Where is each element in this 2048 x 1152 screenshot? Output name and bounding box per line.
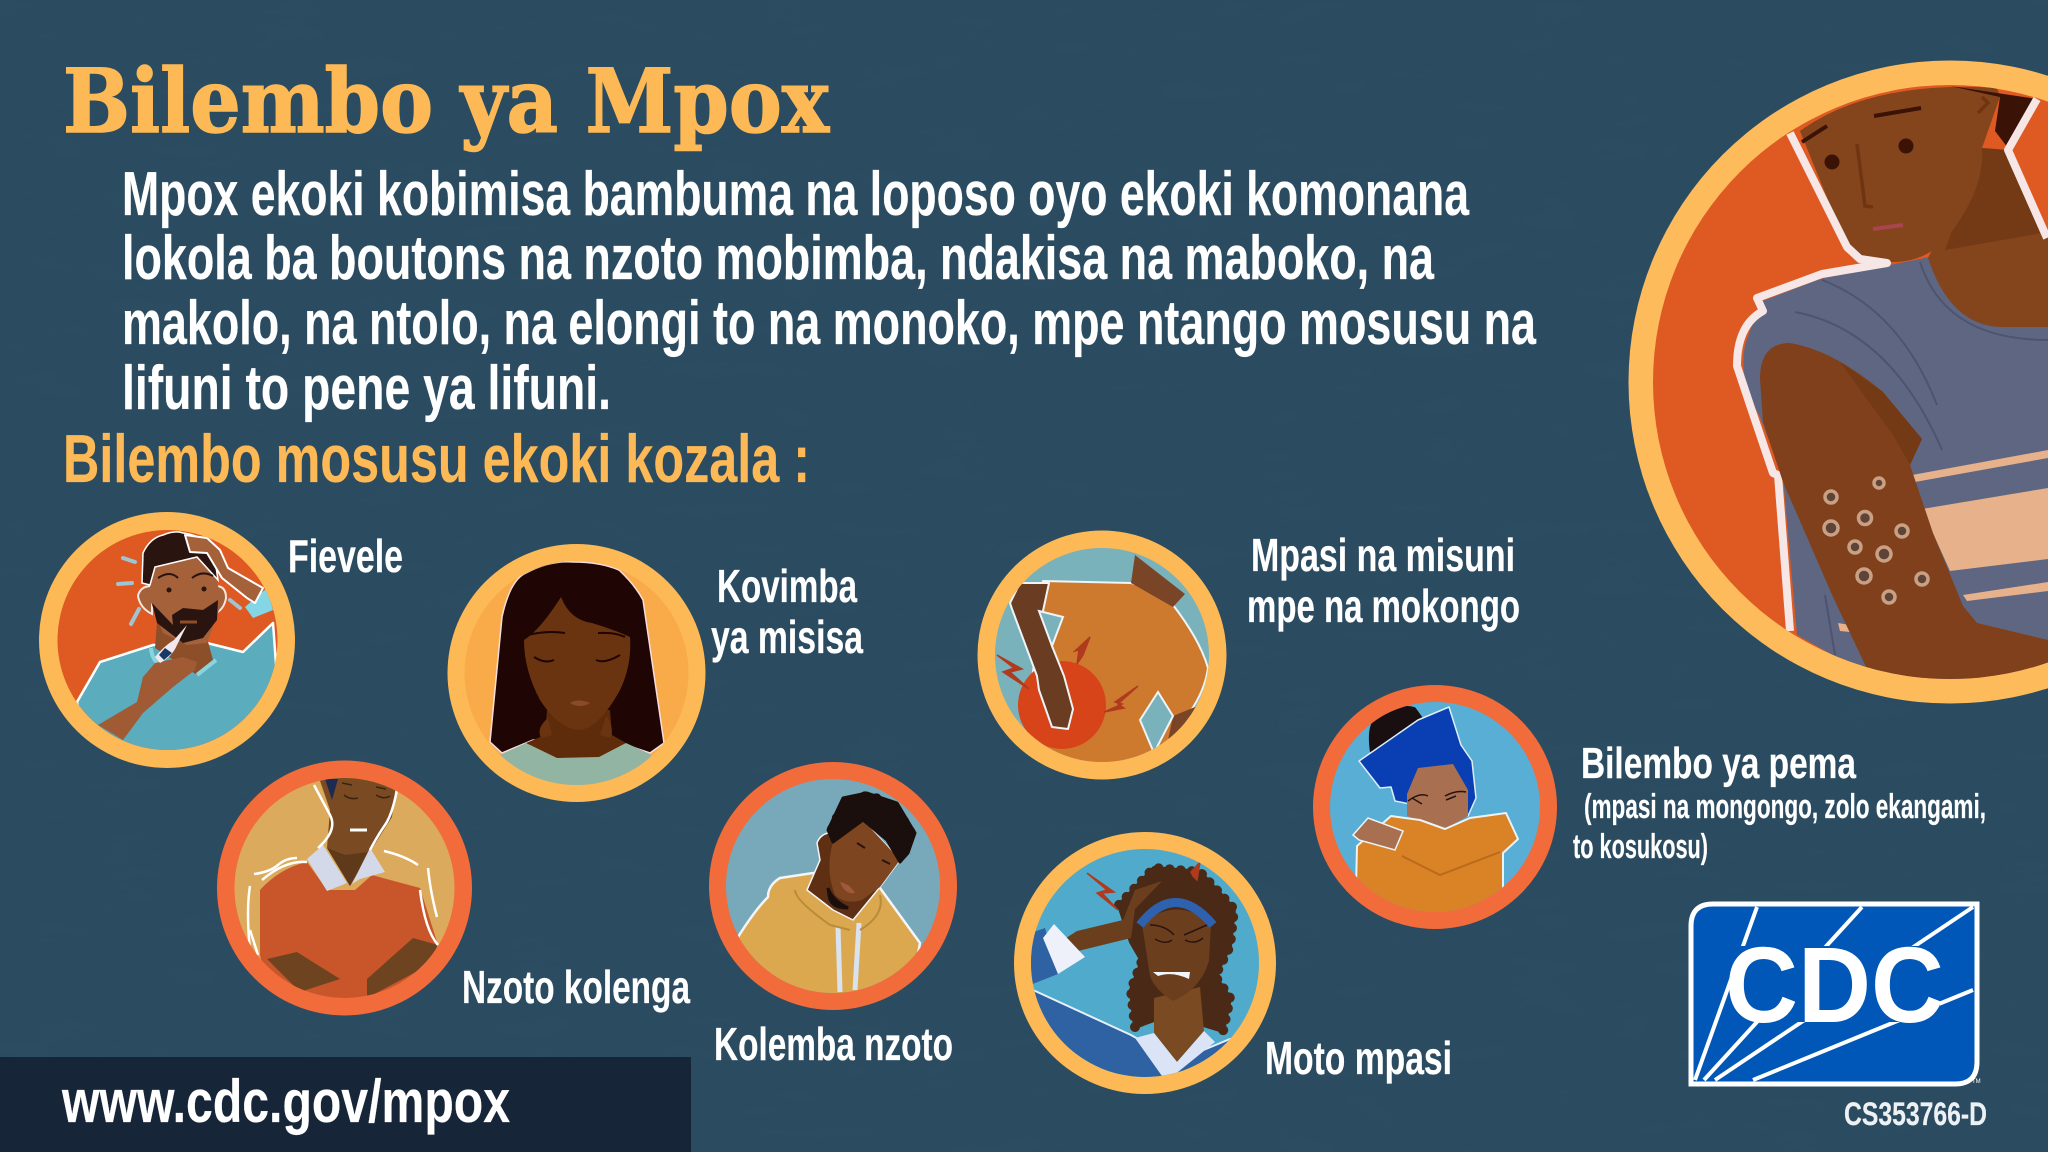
illustration: woman with headache xyxy=(1025,845,1265,1085)
intro paragraph: Mpox ekoki kobimisa bambuma na loposo oyo ekoki komonana xyxy=(122,160,1469,229)
illustration: woman with swollen neck xyxy=(460,560,695,790)
outline xyxy=(1737,99,2047,631)
shirt xyxy=(1743,230,2048,680)
CDC logo xyxy=(1691,904,1981,1085)
website bar xyxy=(0,1057,691,1152)
label: Kolemba nzoto xyxy=(714,1018,953,1070)
panel: Moto mpasi symptom xyxy=(1014,832,1452,1094)
label xyxy=(1573,739,1986,866)
panel: Bilembo ya pema symptom xyxy=(1313,685,1986,930)
face xyxy=(1824,154,1840,170)
label: Bilembo ya pema xyxy=(1581,739,1856,788)
label: Fievele xyxy=(288,530,403,582)
panel: main illustration, arm with rash xyxy=(1628,60,2048,704)
document code: CS353766-D xyxy=(1844,1096,1987,1132)
stripes xyxy=(1838,450,2048,632)
panel: Fievele symptom xyxy=(39,512,403,768)
label: mpe na mokongo xyxy=(1247,580,1520,632)
CDC logo: TM xyxy=(1972,1079,1981,1085)
website bar: www.cdc.gov/mpox xyxy=(61,1068,510,1135)
title: Bilembo ya Mpox xyxy=(63,49,830,153)
label xyxy=(711,560,863,663)
CDC logo: CDC xyxy=(1725,924,1944,1045)
illustration: tired man in hoodie xyxy=(720,775,945,1000)
intro paragraph: makolo, na ntolo, na elongi to na monoko, mpe ntango mosusu na xyxy=(122,289,1536,358)
label: Mpasi na misuni xyxy=(1251,529,1515,581)
panel: Mpasi na misuni symptom xyxy=(978,529,1520,780)
label: to kosukosu) xyxy=(1573,828,1708,866)
label: Kovimba xyxy=(717,560,857,612)
label xyxy=(1247,529,1520,632)
intro paragraph xyxy=(122,160,1536,423)
subheading: Bilembo mosusu ekoki kozala : xyxy=(63,421,810,497)
neck xyxy=(1928,148,2048,327)
label: Moto mpasi xyxy=(1265,1032,1452,1084)
illustration: back and muscle pain xyxy=(990,545,1215,770)
hair xyxy=(1950,86,2037,148)
label: ya misisa xyxy=(711,611,863,663)
rash spots xyxy=(1824,478,1928,603)
intro paragraph: lifuni to pene ya lifuni. xyxy=(122,354,611,423)
panel: Kolemba nzoto symptom xyxy=(709,762,957,1070)
panel: Nzoto kolenga symptom xyxy=(217,760,690,1016)
illustration: man with thermometer xyxy=(58,530,278,750)
intro paragraph: lokola ba boutons na nzoto mobimba, ndakisa na maboko, na xyxy=(122,224,1434,293)
illustration: woman coughing into elbow xyxy=(1330,702,1540,912)
illustration: shivering man xyxy=(230,775,460,1005)
label: Nzoto kolenga xyxy=(462,961,690,1013)
arm xyxy=(1760,343,2048,690)
collar and folds xyxy=(1795,262,2048,655)
panel: Kovimba ya misisa symptom xyxy=(448,544,863,802)
head xyxy=(1800,87,2000,263)
